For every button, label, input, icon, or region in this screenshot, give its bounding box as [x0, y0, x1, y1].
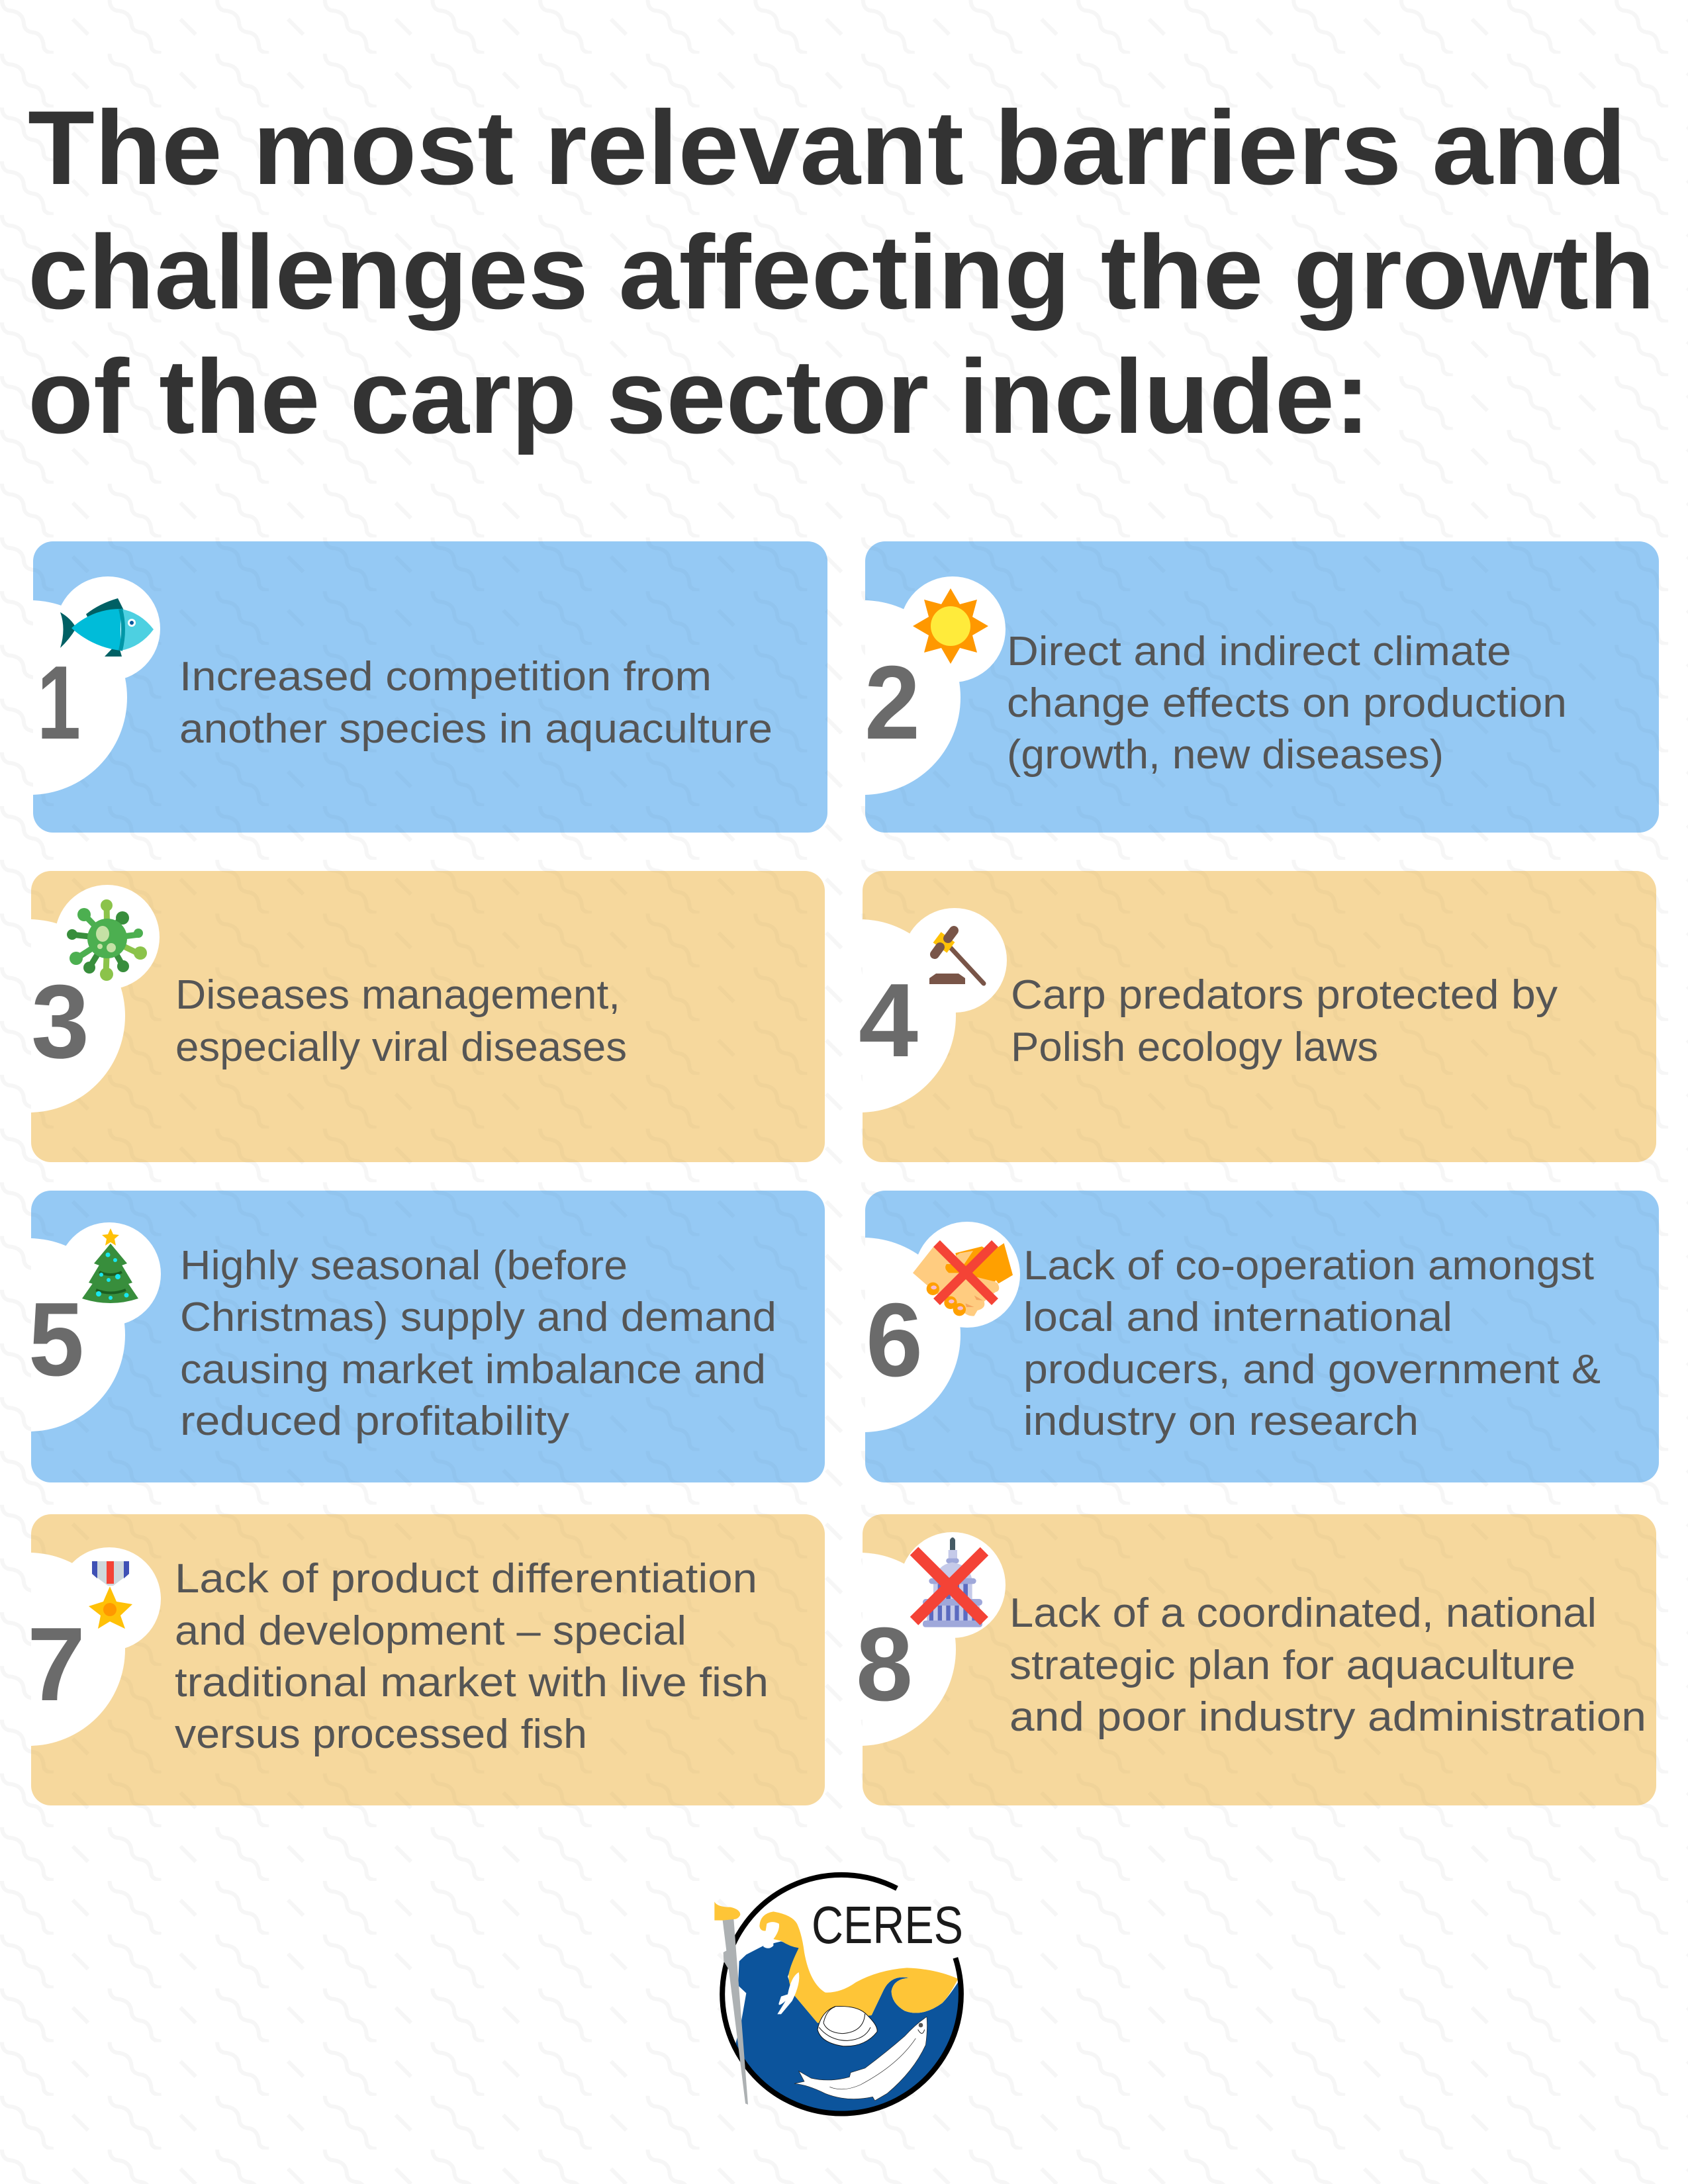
text: item 2 — [1007, 629, 1567, 778]
number 8: 8 — [856, 1606, 913, 1723]
panel: card 7 differentiation — [0, 1514, 825, 1805]
number 4: 4 — [859, 962, 918, 1079]
logo: CERES — [714, 1872, 964, 2116]
text: item 6 — [1023, 1243, 1601, 1444]
panel: card 4 predators — [860, 871, 1656, 1162]
text: item 5: causing market imbalance and — [180, 1347, 766, 1392]
logo wordmark: CERES — [812, 1895, 963, 1954]
text: item 4: Polish ecology laws — [1011, 1024, 1378, 1070]
number 3: 3 — [31, 964, 89, 1080]
text: item 7: Lack of product differentiation — [175, 1556, 757, 1602]
icon: virus — [67, 899, 147, 981]
icon: fish — [60, 598, 154, 657]
panel: card 8 strategic plan — [859, 1514, 1656, 1805]
icon: christmas tree — [82, 1228, 138, 1303]
text: item 8: and poor industry administration — [1009, 1694, 1646, 1740]
text: item 7: versus processed fish — [175, 1711, 587, 1757]
icon: crossed capitol — [914, 1537, 984, 1627]
text: item 5: Highly seasonal (before — [180, 1243, 628, 1289]
panel: card 5 seasonal — [0, 1191, 825, 1482]
text: item 5: reduced profitability — [180, 1398, 569, 1444]
panel: card 3 diseases — [0, 871, 825, 1162]
text: item 6: industry on research — [1023, 1398, 1419, 1444]
text: item 3: especially viral diseases — [175, 1024, 627, 1070]
text: item 7: traditional market with live fish — [175, 1660, 769, 1706]
title: challenges affecting the growth — [28, 213, 1655, 331]
title: The most relevant barriers and — [28, 89, 1626, 206]
text: item 8: Lack of a coordinated, national — [1009, 1590, 1597, 1636]
number 2: 2 — [865, 645, 920, 761]
text: item 2: (growth, new diseases) — [1007, 732, 1444, 778]
text: item 3 — [175, 972, 627, 1070]
text: item 5: Christmas) supply and demand — [180, 1295, 776, 1340]
text: item 5 — [180, 1243, 776, 1444]
text: item 1: another species in aquaculture — [179, 706, 773, 752]
number 5: 5 — [28, 1281, 84, 1398]
icon: medal — [89, 1561, 132, 1629]
text: item 8: strategic plan for aquaculture — [1009, 1643, 1575, 1688]
text: item 1: Increased competition from — [179, 654, 712, 700]
text: item 4 — [1011, 972, 1558, 1070]
text: item 6: local and international — [1023, 1295, 1452, 1340]
number 7: 7 — [27, 1606, 85, 1723]
number 1: 1 — [37, 645, 81, 761]
icon: gavel — [929, 931, 984, 984]
title: of the carp sector include: — [28, 338, 1370, 455]
text: item 7 — [175, 1556, 769, 1757]
text: item 1 — [179, 654, 773, 752]
text: item 7: and development – special — [175, 1608, 686, 1654]
icon: sun — [913, 588, 988, 664]
text: item 2: change effects on production — [1007, 680, 1567, 726]
text: item 3: Diseases management, — [175, 972, 620, 1018]
panel: card 1 competition — [0, 541, 827, 833]
text: item 4: Carp predators protected by — [1011, 972, 1558, 1018]
text: item 8 — [1009, 1590, 1646, 1740]
title — [28, 89, 1655, 455]
panel: card 2 climate — [865, 541, 1659, 833]
text: item 6: Lack of co-operation amongst — [1023, 1243, 1594, 1289]
number 6: 6 — [866, 1282, 923, 1398]
panel: card 6 co-operation — [865, 1191, 1659, 1482]
text: item 2: Direct and indirect climate — [1007, 629, 1511, 674]
icon: crossed handshake — [913, 1243, 1013, 1316]
text: item 6: producers, and government & — [1023, 1347, 1601, 1392]
